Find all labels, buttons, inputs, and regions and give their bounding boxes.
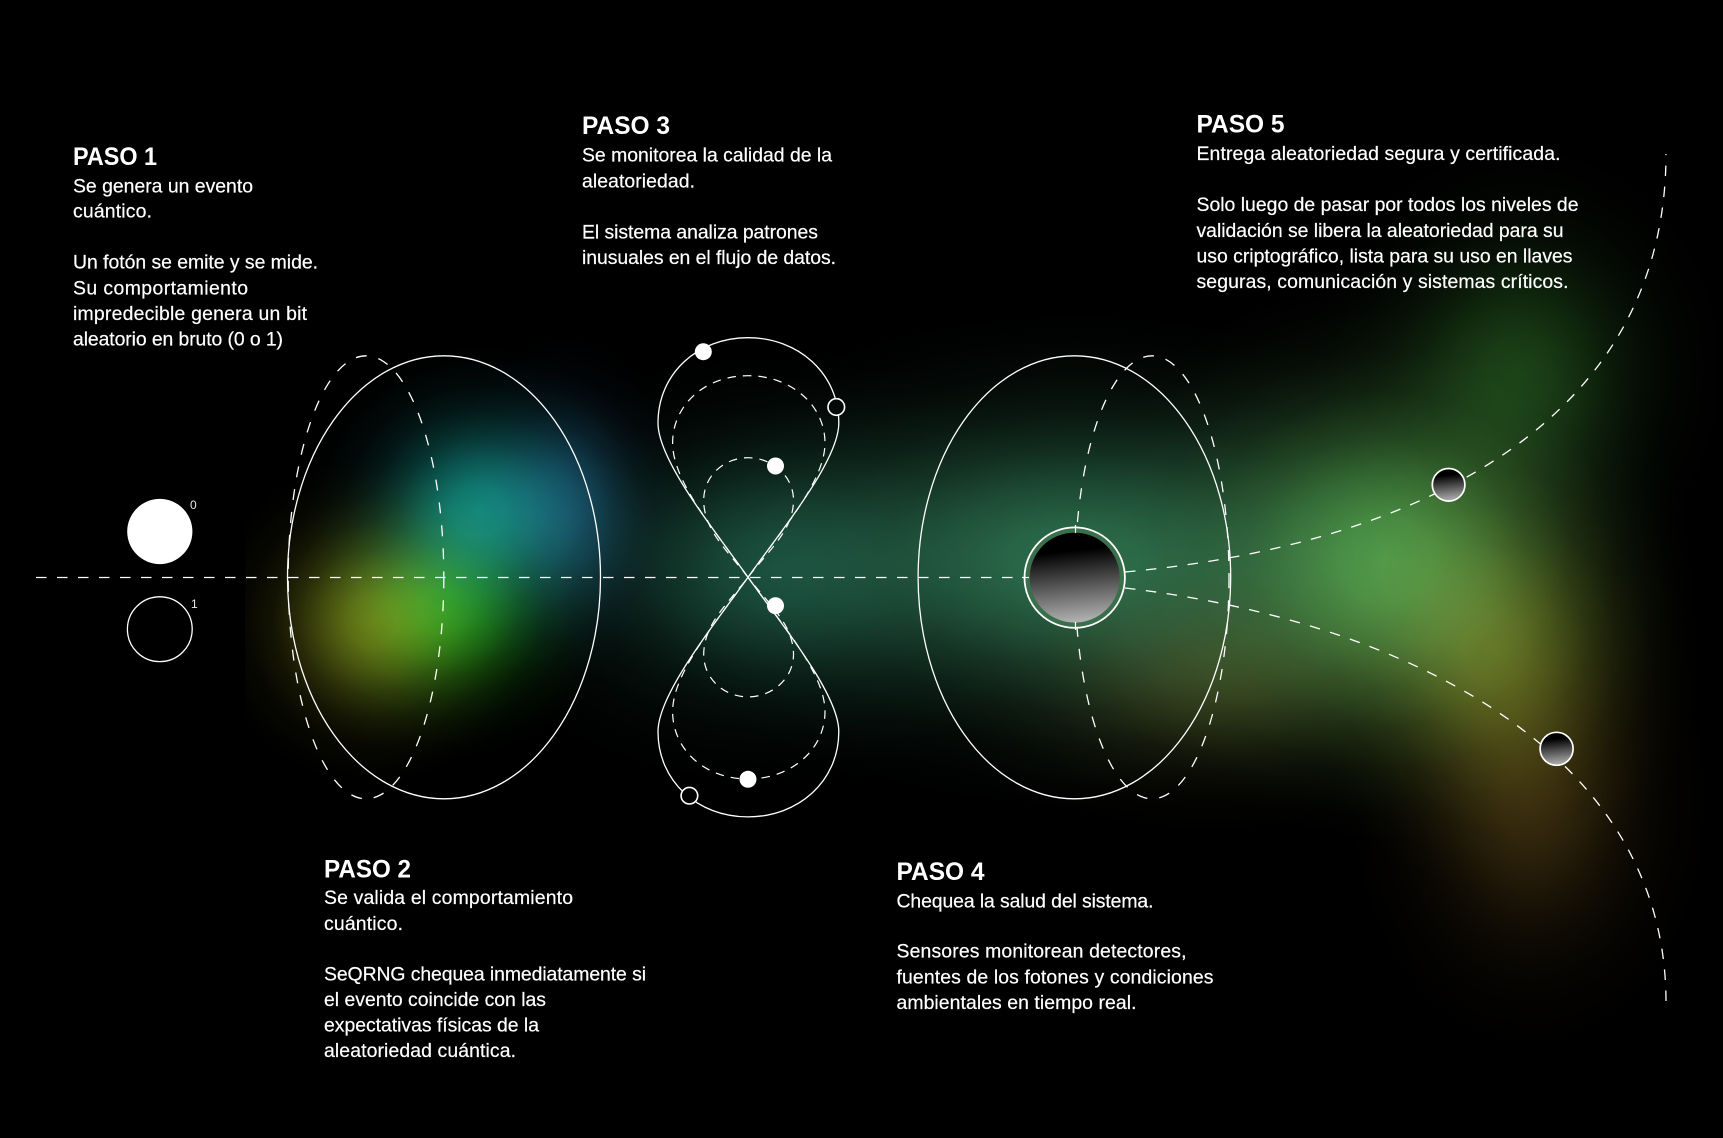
- paso 4 text: ambientales en tiempo real.: [896, 992, 1136, 1014]
- paso 1 text: [73, 143, 318, 351]
- paso 5 text: seguras, comunicación y sistemas críticos.: [1196, 271, 1568, 293]
- paso 3 text: Se monitorea la calidad de la: [582, 144, 832, 166]
- bit state 0: filled circle: [127, 498, 197, 564]
- paso 2 text: SeQRNG chequea inmediatamente si: [324, 964, 646, 986]
- central dashed axis: [36, 576, 1030, 578]
- paso 4 text: Chequea la salud del sistema.: [896, 890, 1154, 912]
- paso 2 text: expectativas físicas de la: [324, 1015, 539, 1037]
- upper output node: [1432, 468, 1465, 501]
- paso 2 text: aleatoriedad cuántica.: [324, 1040, 516, 1062]
- paso 2 text: [324, 855, 646, 1062]
- paso 1 text: impredecible genera un bit: [73, 303, 308, 325]
- paso 3 text: [582, 112, 836, 269]
- paso 1 text: PASO 1: [73, 143, 157, 171]
- central certified sphere: [1022, 525, 1125, 630]
- paso 4 text: fuentes de los fotones y condiciones: [896, 966, 1214, 988]
- paso 2 text: el evento coincide con las: [324, 989, 546, 1011]
- paso 1 text: Su comportamiento: [73, 278, 248, 300]
- paso 2 text: cuántico.: [324, 913, 403, 935]
- paso 5 text: uso criptográfico, lista para su uso en llaves: [1196, 246, 1572, 268]
- paso 5 text: Solo luego de pasar por todos los niveles de: [1196, 194, 1578, 216]
- output branch lower dashed curve: [1125, 588, 1666, 1002]
- paso 2 text: PASO 2: [324, 855, 411, 883]
- paso 3 text: El sistema analiza patrones: [582, 222, 818, 244]
- paso 5 text: PASO 5: [1196, 111, 1285, 139]
- paso 3 text: aleatoriedad.: [582, 170, 695, 192]
- bit state 0: filled circle: 0: [190, 498, 197, 512]
- paso 1 text: Un fotón se emite y se mide.: [73, 252, 318, 274]
- bit state 1: outline circle: [127, 597, 198, 662]
- bit state 1: outline circle: 1: [191, 597, 198, 611]
- paso 5 text: [1196, 111, 1578, 293]
- figure-eight nodes: [681, 343, 845, 804]
- lower output node: [1540, 732, 1573, 765]
- paso 2 sphere: [288, 356, 600, 799]
- background colour glow: [248, 213, 1664, 970]
- paso 5 text: Entrega aleatoriedad segura y certificada.: [1196, 143, 1560, 165]
- paso 5 text: validación se libera la aleatoriedad para su: [1196, 220, 1564, 242]
- paso 1 text: Se genera un evento: [73, 176, 253, 198]
- paso 1 text: aleatorio en bruto (0 o 1): [73, 329, 283, 351]
- paso 4 text: Sensores monitorean detectores,: [896, 941, 1186, 963]
- paso 4 text: [896, 858, 1214, 1014]
- paso 4 text: PASO 4: [896, 858, 985, 886]
- paso 3 text: inusuales en el flujo de datos.: [582, 247, 836, 269]
- paso 4 sphere: [918, 356, 1231, 799]
- output branch upper dashed curve: [1125, 154, 1666, 572]
- paso 3 figure-eight: [658, 338, 845, 817]
- paso 2 text: Se valida el comportamiento: [324, 887, 573, 909]
- paso 1 text: cuántico.: [73, 201, 152, 223]
- paso 3 text: PASO 3: [582, 112, 670, 140]
